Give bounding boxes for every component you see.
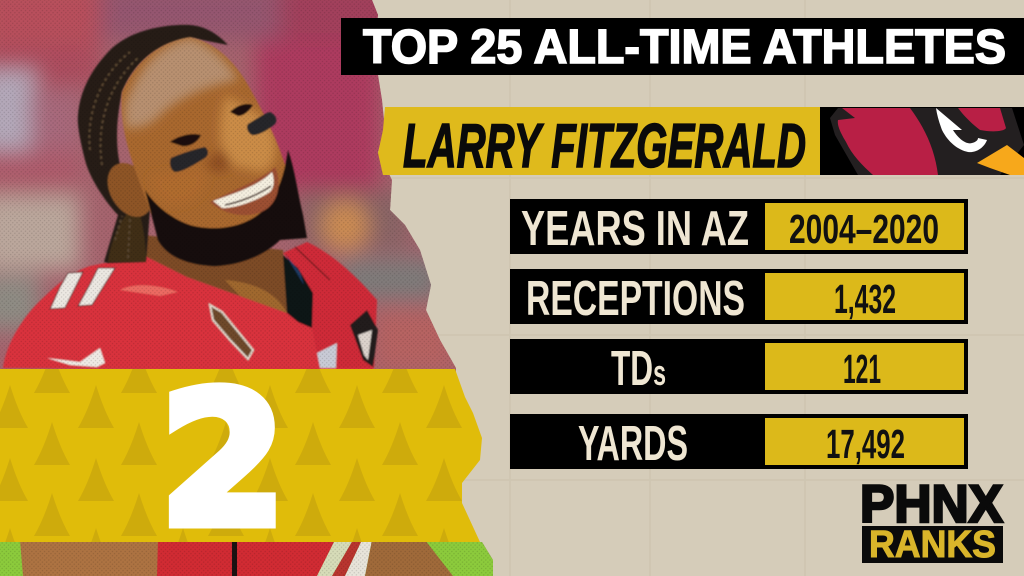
rank number: 2: [160, 354, 286, 566]
collar: [283, 255, 313, 328]
stat row: receptions: RECEPTIONS: [526, 272, 745, 326]
arrowhead patch: [210, 305, 253, 359]
halftone overlay: [0, 0, 500, 370]
mouth: [210, 167, 279, 215]
panel: player photo: [0, 0, 500, 576]
jersey: [3, 235, 378, 372]
stat row: TDs: TDs: [611, 342, 666, 396]
stadium blurred background: [0, 0, 455, 372]
RANKS wordmark: RANKS: [869, 524, 996, 566]
face: [98, 37, 307, 266]
yellow rank band: [0, 369, 482, 542]
stat row: receptions: 1,432: [834, 276, 896, 322]
eye black: [170, 147, 208, 172]
stat row: years in AZ: YEARS IN AZ: [521, 202, 749, 256]
beard: [145, 150, 307, 266]
stat row: yards: YARDS: [578, 417, 688, 471]
sleeve number 11: [50, 272, 83, 309]
stat row: yards: [510, 414, 968, 471]
ear: [106, 162, 150, 218]
stat row: yards: 17,492: [826, 421, 905, 467]
title banner: [341, 18, 1024, 75]
PHNX Ranks logo: [860, 475, 1003, 566]
PHNX wordmark: PHNX: [860, 475, 1003, 534]
hair: [78, 25, 228, 263]
shoulder patch: [350, 310, 378, 367]
stat row: TDs: [510, 339, 968, 396]
neck: [143, 235, 287, 313]
stat row: years in AZ: [510, 199, 968, 256]
stat row: years in AZ: 2004–2020: [789, 206, 939, 252]
arms below band: [0, 540, 500, 576]
face shading: [125, 38, 276, 205]
cardinals logo: [820, 107, 1024, 175]
swoosh: [47, 348, 105, 367]
player name: LARRY FITZGERALD: [403, 112, 806, 181]
title text: TOP 25 ALL-TIME ATHLETES: [363, 21, 1006, 74]
arrow pattern: [0, 369, 462, 542]
stat row: receptions: [510, 269, 968, 326]
stat row: TDs: 121: [843, 346, 881, 392]
eyes: [170, 134, 201, 146]
player name banner: [378, 107, 820, 181]
